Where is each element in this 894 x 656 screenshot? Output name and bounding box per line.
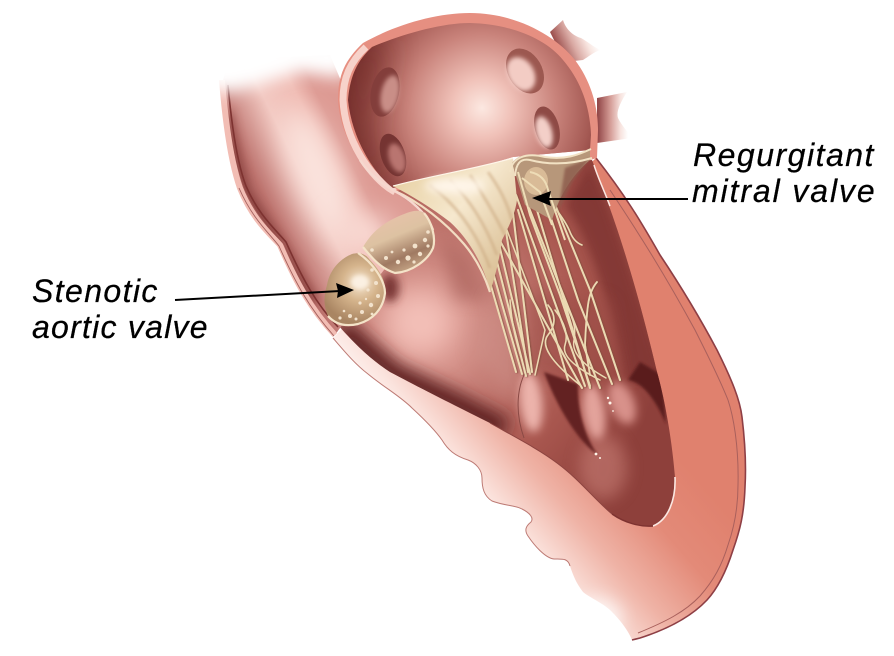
left wall light band xyxy=(343,47,395,192)
arrow to mitral valve xyxy=(532,191,688,206)
pulmonary vein stub upper xyxy=(550,20,600,62)
papillary muscle right xyxy=(603,378,641,428)
bottom fade of wall xyxy=(570,598,622,638)
label: stenotic aortic valve: Stenotic xyxy=(32,273,159,309)
chordae tendineae xyxy=(484,170,620,388)
dark recess right of papillary muscles xyxy=(628,362,666,424)
label: regurgitant mitral valve: mitral valve xyxy=(692,173,877,209)
dark recess between papillary muscles xyxy=(544,372,598,455)
pulmonary vein opening top right xyxy=(498,42,552,100)
aortic valve cusp lower xyxy=(324,253,385,325)
wall rim above aortic valve xyxy=(360,160,433,230)
aortic valve cusp upper xyxy=(363,211,434,273)
outer ventricular wall xyxy=(333,158,746,640)
label: stenotic aortic valve xyxy=(32,273,209,345)
arrow to aortic valve xyxy=(175,283,354,300)
wall rim between atrium and ventricle xyxy=(393,190,490,292)
left atrium cavity xyxy=(345,23,591,190)
posterior mitral leaflet xyxy=(510,149,592,240)
pulmonary vein opening lower left xyxy=(375,130,411,180)
lower chamber highlight xyxy=(579,436,627,500)
label: regurgitant mitral valve xyxy=(692,137,877,209)
papillary muscle middle xyxy=(579,383,609,441)
aorta xyxy=(220,62,420,337)
label: regurgitant mitral valve: Regurgitant xyxy=(693,137,875,173)
label: stenotic aortic valve: aortic valve xyxy=(32,309,209,345)
left atrium wall xyxy=(338,13,598,192)
left ventricle cavity xyxy=(338,160,675,526)
fade at top of aorta xyxy=(205,40,350,92)
anterior mitral leaflet xyxy=(393,158,517,292)
papillary muscle left xyxy=(517,371,545,438)
aortic wall band xyxy=(222,80,335,335)
pulmonary vein opening upper left xyxy=(366,65,404,119)
pulmonary vein stub lower xyxy=(597,92,632,143)
pulmonary vein opening lower right xyxy=(530,104,564,152)
